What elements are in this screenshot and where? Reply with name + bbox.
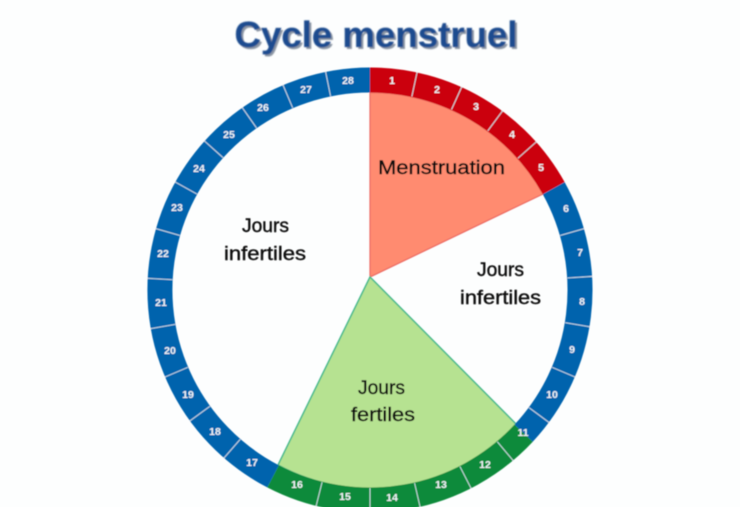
label: infertile days right: Jours bbox=[477, 260, 524, 281]
label: infertile days right: infertiles bbox=[460, 288, 541, 309]
day numbers: 21 bbox=[155, 297, 167, 309]
day numbers: 26 bbox=[257, 102, 269, 114]
day numbers bbox=[155, 75, 585, 504]
day numbers: 2 bbox=[434, 84, 440, 96]
day numbers: 14 bbox=[386, 492, 398, 504]
ring: fertile days bbox=[273, 433, 524, 500]
label: fertile days: fertiles bbox=[351, 405, 415, 426]
label: menstruation: Menstruation bbox=[378, 158, 505, 179]
wedge: fertile days bbox=[278, 277, 517, 489]
day numbers: 22 bbox=[157, 248, 169, 260]
wheel bbox=[147, 71, 593, 507]
day numbers: 11 bbox=[517, 427, 529, 439]
day numbers: 9 bbox=[569, 344, 575, 356]
day numbers: 8 bbox=[579, 296, 585, 308]
day numbers: 19 bbox=[182, 389, 194, 401]
day numbers: 25 bbox=[223, 129, 235, 141]
label: infertile days right bbox=[460, 260, 541, 309]
day numbers: 3 bbox=[473, 101, 479, 113]
day numbers: 20 bbox=[164, 345, 176, 357]
day numbers: 23 bbox=[171, 202, 183, 214]
day numbers: 27 bbox=[300, 84, 312, 96]
day numbers: 17 bbox=[246, 457, 258, 469]
ring: menstruation days bbox=[370, 80, 554, 188]
label: fertile days: Jours bbox=[358, 378, 405, 399]
day numbers: 4 bbox=[509, 129, 515, 141]
day numbers: 16 bbox=[291, 479, 303, 491]
day numbers: 5 bbox=[538, 162, 544, 174]
label: infertile days left: infertiles bbox=[224, 244, 306, 265]
ring separators bbox=[147, 71, 593, 507]
day numbers: 6 bbox=[563, 203, 569, 215]
day numbers: 18 bbox=[209, 426, 221, 438]
label: infertile days left bbox=[224, 216, 306, 265]
day numbers: 12 bbox=[479, 459, 491, 471]
ring: infertile days before menstruation bbox=[160, 80, 370, 476]
day numbers: 28 bbox=[342, 75, 354, 87]
day numbers: 10 bbox=[546, 389, 558, 401]
day numbers: 7 bbox=[577, 247, 583, 259]
day numbers: 1 bbox=[389, 75, 395, 87]
wedge: menstruation bbox=[370, 92, 543, 277]
title: Cycle menstruel bbox=[236, 16, 520, 57]
day numbers: 24 bbox=[193, 163, 205, 175]
day numbers: 13 bbox=[435, 479, 447, 491]
label: fertile days bbox=[351, 378, 415, 426]
day numbers: 15 bbox=[339, 491, 351, 503]
label: infertile days left: Jours bbox=[242, 216, 289, 237]
ring: infertile days after menstruation bbox=[524, 188, 580, 433]
title: Cycle menstruel bbox=[234, 14, 518, 55]
